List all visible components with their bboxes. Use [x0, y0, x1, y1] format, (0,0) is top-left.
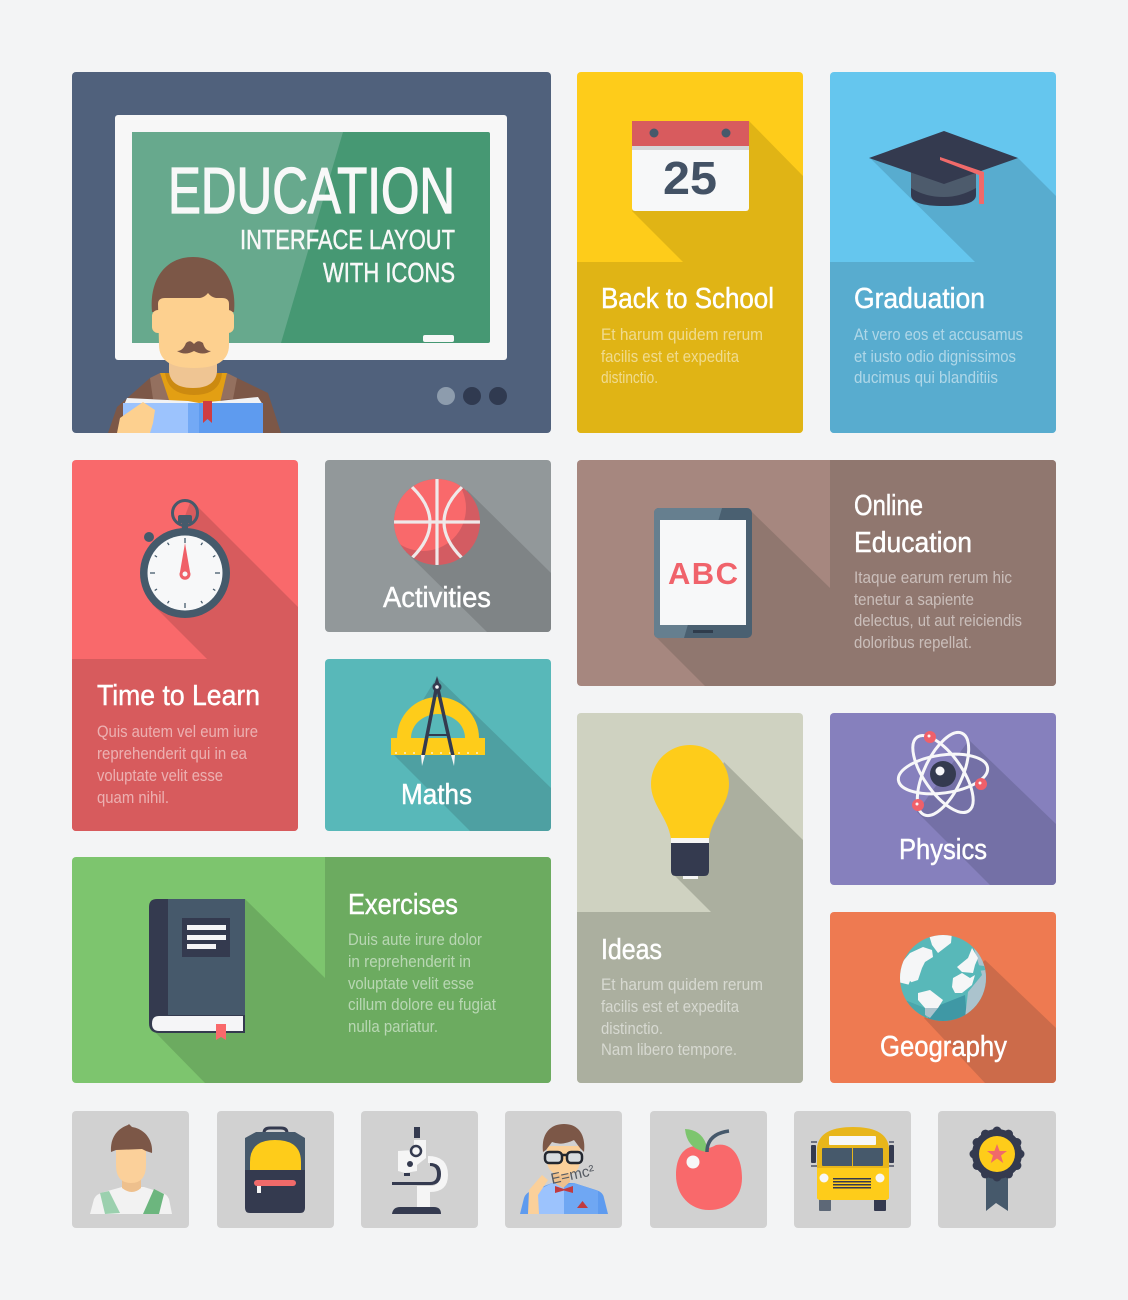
body text: reprehenderit qui in ea: [97, 745, 248, 763]
body text: quam nihil.: [97, 789, 169, 807]
icon: globe: [898, 932, 995, 1030]
heading: Back to School: [601, 283, 774, 315]
panel: geography: [830, 912, 1056, 1083]
body text: facilis est et expedita: [601, 348, 740, 366]
long shadow: [72, 500, 298, 831]
label: Activities: [383, 582, 491, 614]
label: Maths: [401, 779, 472, 811]
body text: Duis aute irure dolor: [348, 931, 482, 949]
panel: back to school: [577, 72, 803, 433]
body text: [854, 569, 1022, 652]
tile: scientist: [505, 1111, 622, 1228]
icon: calendar: 25: [663, 152, 717, 204]
body text: tenetur a sapiente: [854, 591, 974, 609]
heading: Education: [854, 527, 972, 559]
tile: backpack: [217, 1111, 334, 1228]
body text: facilis est et expedita: [601, 998, 740, 1016]
pagination dots: [437, 387, 507, 405]
long shadow: [655, 460, 1056, 686]
body text: voluptate velit esse: [348, 975, 474, 993]
panel: online education: [577, 460, 1056, 686]
body text: Et harum quidem rerum: [601, 976, 763, 994]
teacher figure: [108, 257, 281, 433]
body text: Et harum quidem rerum: [601, 326, 763, 344]
long shadow: [830, 158, 1056, 433]
body text: doloribus repellat.: [854, 634, 972, 652]
icon: atom: [896, 725, 990, 823]
icon: school bus: [811, 1127, 894, 1211]
body text: delectus, ut aut reiciendis: [854, 612, 1022, 630]
heading: Exercises: [348, 889, 458, 921]
icon: tablet: ABC: [668, 556, 738, 591]
body text: Itaque earum rerum hic: [854, 569, 1012, 587]
label: Geography: [880, 1031, 1007, 1063]
body text: ducimus qui blanditiis: [854, 369, 998, 387]
icon: apple: [676, 1129, 742, 1210]
body text: [601, 976, 763, 1059]
label: Physics: [899, 834, 987, 866]
heading: Online: [854, 490, 923, 522]
body text: Nam libero tempore.: [601, 1041, 737, 1059]
body text: voluptate velit esse: [97, 767, 223, 785]
long shadow: [577, 762, 803, 1083]
body text: [97, 723, 258, 807]
body text: in reprehenderit in: [348, 953, 471, 971]
icon: graduation cap: [869, 131, 1018, 206]
heading: Ideas: [601, 934, 662, 966]
heading: Time to Learn: [97, 680, 260, 712]
icon: calendar: [632, 121, 749, 211]
icon: rosette: [970, 1126, 1024, 1211]
tile: apple: [650, 1111, 767, 1228]
body text: distinctio.: [601, 369, 658, 387]
long shadow: [577, 121, 803, 433]
tile: school bus: [794, 1111, 911, 1228]
tile: student: [72, 1111, 189, 1228]
heading: Graduation: [854, 283, 985, 315]
panel: exercises: [72, 857, 551, 1083]
body text: [348, 931, 496, 1036]
chalkboard: [115, 115, 507, 360]
icon: nerd scientist: E=mc²: [549, 1162, 596, 1188]
body text: nulla pariatur.: [348, 1018, 438, 1036]
icon: microscope: [392, 1127, 448, 1214]
long shadow: [154, 857, 551, 1083]
panel: graduation: [830, 72, 1056, 433]
long shadow: [391, 677, 551, 831]
body text: distinctio.: [601, 1020, 663, 1038]
body text: [601, 328, 762, 383]
icon: student boy: [90, 1124, 172, 1214]
body text: At vero eos et accusamus: [854, 326, 1023, 344]
long shadow: [924, 960, 1056, 1083]
icon: tablet: [654, 508, 752, 638]
icon: backpack: [245, 1128, 305, 1213]
panel: education hero: [72, 72, 551, 433]
tile: award badge: [938, 1111, 1056, 1228]
long shadow: [406, 490, 551, 632]
long shadow: [917, 740, 1056, 885]
icon: stopwatch: [140, 500, 230, 618]
subtitle: [242, 230, 455, 282]
body text: et iusto odio dignissimos: [854, 348, 1016, 366]
panel: physics: [830, 713, 1056, 885]
subtitle: WITH ICONS: [323, 257, 455, 288]
panel: maths: [325, 659, 551, 831]
icon: book: [149, 899, 245, 1040]
body text: cillum dolore eu fugiat: [348, 996, 496, 1014]
heading: [854, 494, 970, 552]
icon: protractor and compass: [391, 676, 485, 766]
icon: light bulb: [651, 745, 729, 879]
title: EDUCATION: [168, 154, 455, 227]
tile: microscope: [361, 1111, 478, 1228]
panel: time to learn: [72, 460, 298, 831]
panel: activities: [325, 460, 551, 632]
subtitle: INTERFACE LAYOUT: [240, 224, 455, 255]
icon: basketball: [394, 479, 480, 565]
panel: ideas: [577, 713, 803, 1083]
body text: [854, 326, 1023, 387]
body text: Quis autem vel eum iure: [97, 723, 258, 741]
